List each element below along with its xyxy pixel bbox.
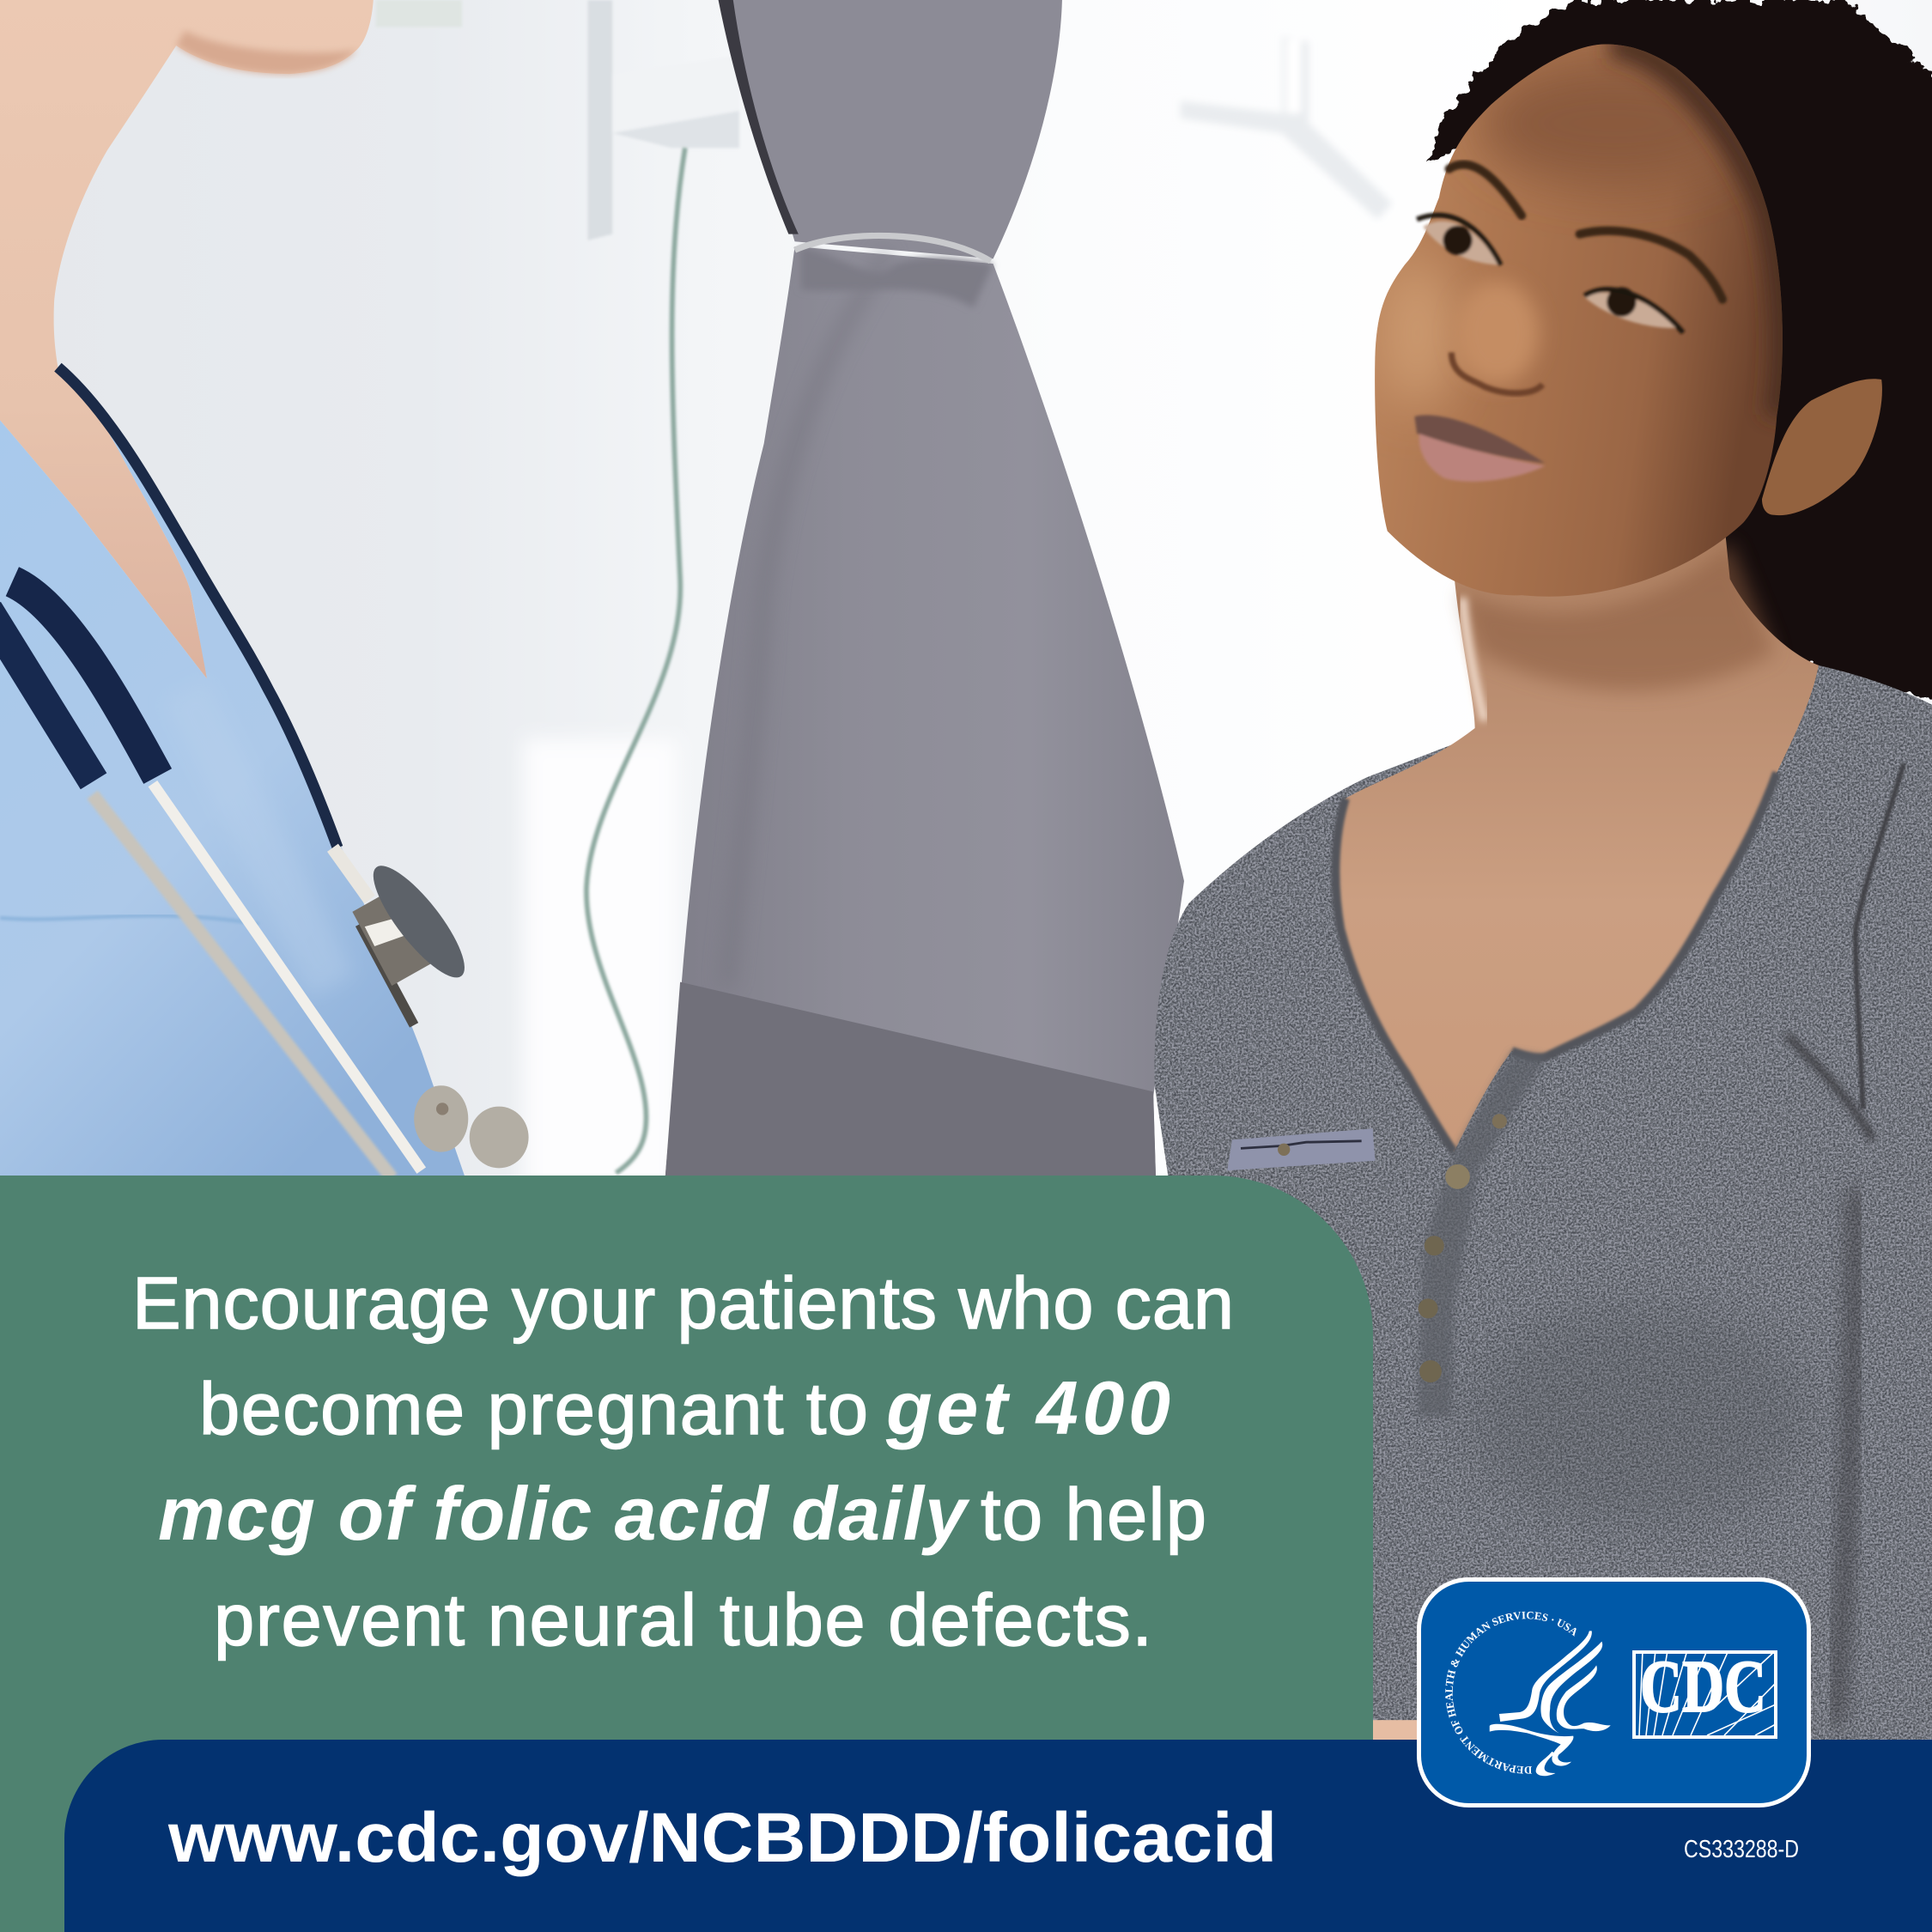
background: exam room wall — [53, 0, 1932, 1176]
patient sweater pocket — [1227, 1128, 1375, 1170]
nurse skin: neck and chin — [0, 0, 374, 679]
patient forehead tone — [1479, 62, 1750, 185]
patient sweater underbust shadow — [1467, 1306, 1811, 1528]
icon: HHS eagle — [1490, 1631, 1611, 1776]
patient ear — [1762, 379, 1882, 515]
stethoscope ear tips — [414, 1085, 529, 1168]
nurse — [0, 0, 529, 1183]
badge: HHS and CDC logos — [1417, 1577, 1811, 1807]
icon: CDC logo: CDC — [1640, 1644, 1766, 1728]
curtain top section — [720, 0, 1062, 258]
patient — [1154, 0, 1932, 1742]
message text: Encourage your patients who can — [132, 1263, 1234, 1345]
message text — [132, 1263, 1234, 1662]
patient sweater folds — [1787, 764, 1904, 1725]
message text: prevent neural tube defects. — [214, 1580, 1152, 1662]
patient neck and chest — [1335, 530, 1819, 1152]
patient neckline trim — [1335, 773, 1777, 1152]
message text: become pregnant to — [199, 1369, 868, 1450]
patient hairline shade — [1610, 45, 1783, 416]
patient nose — [1451, 281, 1543, 393]
icon: HHS seal text: DEPARTMENT OF HEALTH & HUMAN SERVICES · USA — [1445, 1611, 1577, 1774]
green wire — [586, 148, 685, 1173]
stethoscope — [0, 368, 422, 1178]
curtain tie — [795, 235, 991, 261]
curtain lower section — [665, 246, 1184, 1176]
patient hair — [1428, 0, 1932, 708]
patient eyes — [1417, 216, 1683, 332]
patient neck shadow — [1460, 542, 1774, 690]
stethoscope chest piece — [352, 854, 478, 989]
panel: navy URL bar — [64, 1740, 1932, 1932]
wall fixture: shelf — [376, 0, 739, 240]
panel: green message panel — [0, 1176, 1373, 1932]
nurse scrub top — [0, 368, 467, 1183]
patient neck highlight — [1462, 598, 1485, 720]
wall fixture: hook — [1181, 37, 1392, 219]
curtain dark lower band — [665, 982, 1156, 1176]
message text: to help — [981, 1474, 1206, 1556]
message text: get 400 — [885, 1365, 1170, 1450]
patient eyebrows — [1449, 165, 1522, 216]
curtain folds — [727, 252, 887, 986]
curtain — [665, 0, 1184, 1176]
patient hand — [1370, 1720, 1419, 1742]
patient face — [1375, 44, 1783, 597]
patient sweater — [1154, 665, 1932, 1742]
patient mouth — [1414, 415, 1545, 482]
message text: mcg of folic acid daily — [158, 1471, 970, 1556]
patient cheek light — [1380, 258, 1454, 407]
patient sweater placket and buttons — [1417, 1051, 1547, 1417]
document code: CS333288-D — [1684, 1836, 1799, 1863]
website URL: www.cdc.gov/NCBDDD/folicacid — [167, 1799, 1277, 1877]
